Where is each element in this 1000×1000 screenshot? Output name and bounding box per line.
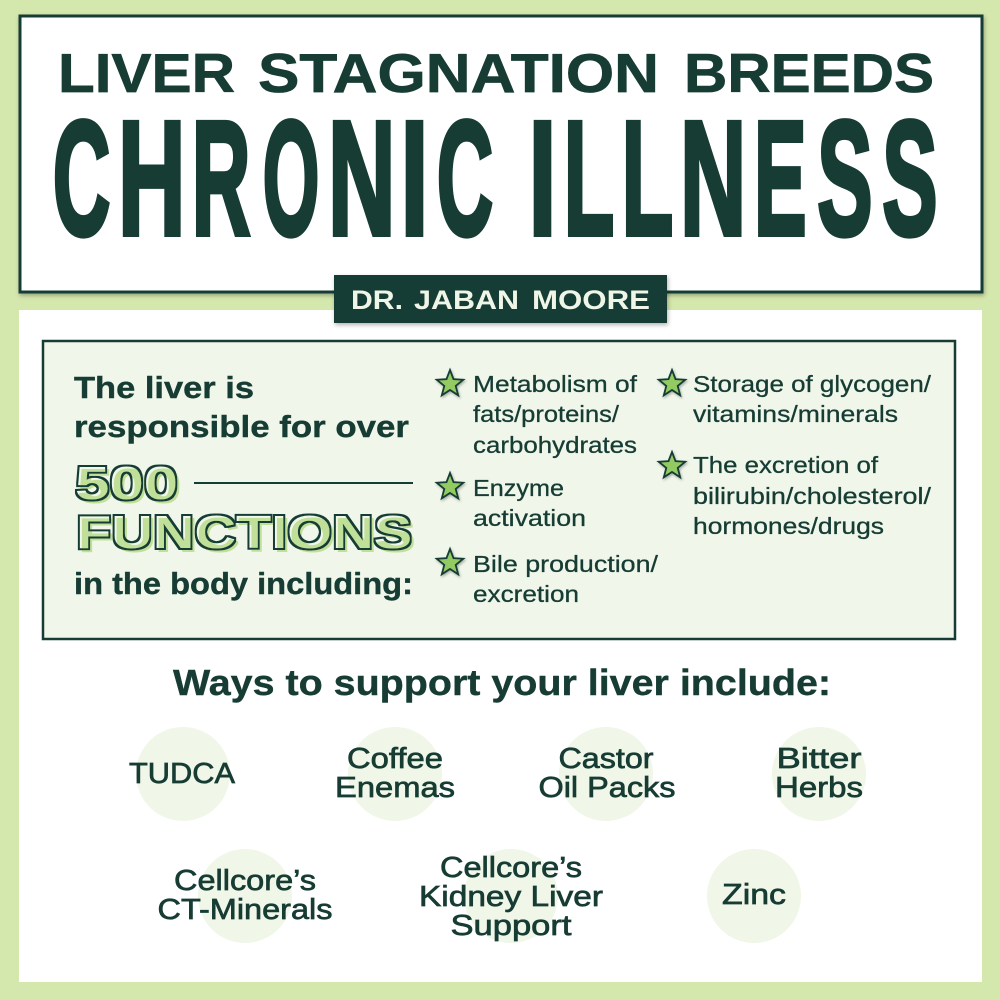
support item: bitter herbs <box>772 727 866 821</box>
support item: coffee enemas: Enemas <box>335 772 455 804</box>
support item: CT-minerals: Cellcore’s <box>174 865 316 897</box>
list item: excretion: hormones/drugs <box>693 513 884 539</box>
support item: TUDCA <box>129 727 236 821</box>
callout: 500 functions <box>75 457 413 558</box>
heading: chronic illness: N <box>680 86 746 270</box>
support item: castor oil packs: Oil Packs <box>538 772 676 804</box>
list item: metabolism <box>437 370 638 458</box>
support item: zinc <box>707 849 801 943</box>
list item: bile: Bile production/ <box>473 551 659 577</box>
support item: CT-minerals <box>158 849 332 943</box>
heading: chronic illness: S <box>882 86 938 270</box>
heading: chronic illness: C <box>437 86 493 270</box>
support item: bitter herbs: Herbs <box>775 772 863 804</box>
author badge: JABAN <box>414 285 519 315</box>
support item: kidney liver support: Kidney Liver <box>419 881 603 913</box>
author badge <box>334 275 667 323</box>
support item: coffee enemas: Coffee <box>347 743 443 775</box>
list item: metabolism: fats/proteins/ <box>473 401 620 427</box>
text: in the body including: in the body including: <box>74 566 413 601</box>
support item: castor oil packs <box>538 727 676 821</box>
text: the liver is responsible: responsible for over <box>74 409 409 444</box>
heading: chronic illness: L <box>622 86 673 270</box>
list item: excretion: bilirubin/cholesterol/ <box>693 483 932 509</box>
list item: enzyme: activation <box>473 505 586 531</box>
list item: excretion: The excretion of <box>693 452 879 478</box>
support item: zinc: Zinc <box>722 879 786 911</box>
heading: chronic illness: C <box>53 86 110 270</box>
heading: chronic illness: S <box>817 86 873 270</box>
list item: bile <box>437 549 659 607</box>
support item: coffee enemas <box>335 727 455 821</box>
support item: kidney liver support: Cellcore’s <box>440 852 582 884</box>
author badge: MOORE <box>532 285 650 315</box>
list item: metabolism: Metabolism of <box>473 371 638 397</box>
support item: kidney liver support <box>419 849 603 943</box>
heading: chronic illness: L <box>564 86 614 270</box>
heading: liver stagnation breeds: STAGNATION <box>258 42 659 104</box>
heading: chronic illness: I <box>528 86 556 270</box>
list item: bile: excretion <box>473 581 579 607</box>
heading: liver stagnation breeds <box>58 42 934 104</box>
heading: chronic illness: E <box>754 86 807 270</box>
callout: 500 functions: FUNCTIONS <box>76 506 412 558</box>
heading: liver stagnation breeds: LIVER <box>58 42 235 104</box>
heading: ways to support: Ways to support your liver include: <box>173 662 831 703</box>
text: the liver is responsible: The liver is <box>74 370 254 405</box>
support item: CT-minerals: CT-Minerals <box>158 894 332 926</box>
heading: chronic illness: N <box>328 86 396 270</box>
heading: chronic illness: I <box>400 86 428 270</box>
heading: chronic illness: R <box>192 86 250 270</box>
panel: liver functions <box>43 341 955 639</box>
list item: excretion <box>659 452 932 539</box>
list item: storage: vitamins/minerals <box>693 401 898 427</box>
list item: storage <box>659 370 932 427</box>
content panel background <box>19 310 982 982</box>
author badge: DR. <box>351 285 403 315</box>
list item: storage: Storage of glycogen/ <box>693 371 932 397</box>
callout: 500 functions: 500 <box>75 457 178 509</box>
support item: TUDCA: TUDCA <box>129 758 236 790</box>
list item: metabolism: carbohydrates <box>473 432 637 458</box>
heading: chronic illness: H <box>118 86 186 270</box>
support item: bitter herbs: Bitter <box>776 743 862 775</box>
heading: chronic illness: O <box>263 86 319 270</box>
support item: kidney liver support: Support <box>450 910 572 942</box>
list item: enzyme: Enzyme <box>473 475 564 501</box>
support item: castor oil packs: Castor <box>558 743 654 775</box>
text: the liver is responsible <box>74 370 409 444</box>
header panel <box>20 16 982 292</box>
list item: enzyme <box>437 473 586 531</box>
heading: liver stagnation breeds: BREEDS <box>684 42 934 104</box>
